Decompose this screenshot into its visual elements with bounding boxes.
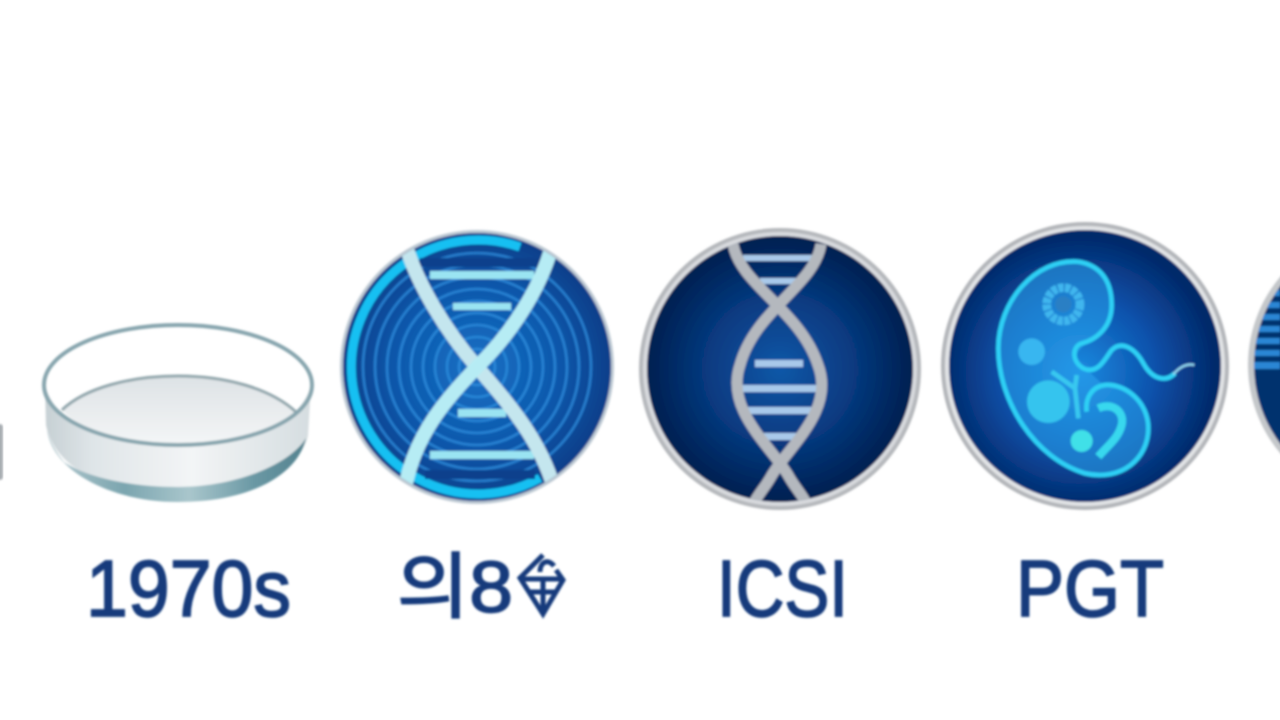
label: Korean mark: 의8 (397, 548, 513, 628)
gear cell nucleus (1055, 296, 1071, 312)
embryo glow (998, 261, 1148, 475)
branches (1052, 372, 1078, 418)
icon: glass petri dish (44, 325, 312, 502)
DNA rungs (430, 271, 534, 459)
gear cell (1047, 288, 1080, 321)
label: PGT: PGT (1016, 544, 1164, 633)
label: ICSI: ICSI (717, 544, 848, 633)
dish inner rim line (62, 376, 296, 412)
stripes (1250, 290, 1280, 369)
DNA strands (405, 246, 554, 488)
label: 1970s: 1970s (86, 544, 291, 633)
large cell (1027, 380, 1070, 423)
cyan arc (351, 240, 540, 494)
concentric rings (363, 253, 591, 481)
fetus (1098, 406, 1122, 457)
dish top rim (44, 325, 312, 445)
icon: DNA circle with concentric rings (340, 230, 614, 504)
tail end (1173, 365, 1194, 374)
icon: partial neighbour at left edge (0, 424, 3, 480)
hex cell (1018, 338, 1045, 365)
dish inner floor (62, 376, 296, 445)
helix rungs (740, 255, 818, 440)
small cell (1071, 430, 1093, 452)
dark bands (420, 258, 540, 479)
icon: partial striped circle at right edge (1247, 276, 1280, 454)
embryo outline and tail (998, 261, 1175, 475)
dish base shadow band (47, 430, 306, 502)
label: Korean mark (397, 548, 563, 628)
infographic: timeline of icons and labels (0, 220, 1280, 620)
icon: embryo circle with silver rim (941, 222, 1229, 510)
helix strands (733, 244, 822, 510)
dish wall (45, 385, 311, 495)
icon: DNA helix circle with silver rim (639, 228, 921, 510)
icon: diamond mark (520, 555, 563, 614)
